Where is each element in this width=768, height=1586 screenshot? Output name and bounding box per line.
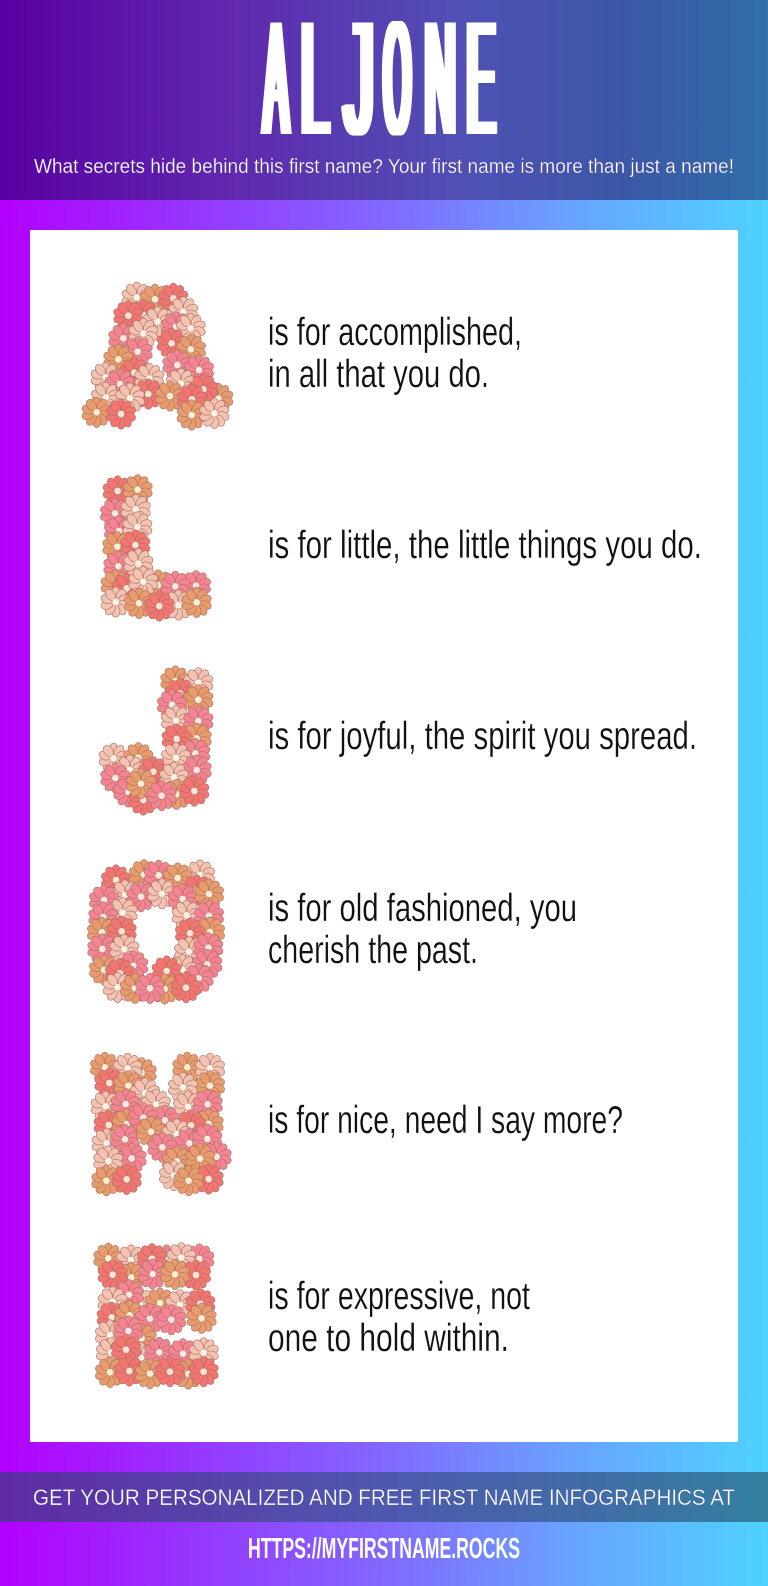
title	[260, 0, 498, 169]
icon: flower letter N	[89, 1052, 232, 1196]
text: O line	[268, 887, 577, 972]
icon: flower letter J	[98, 666, 214, 815]
icon: flower letter O	[86, 859, 226, 1004]
text: A line	[268, 311, 522, 396]
icon: flower letter A	[81, 282, 234, 430]
header band	[0, 0, 768, 200]
white content panel	[30, 230, 738, 1442]
text: O line: is for old fashioned, you	[268, 887, 577, 930]
text: O line: cherish the past.	[268, 929, 478, 972]
text: A line: is for accomplished,	[268, 311, 522, 354]
icon: flower letter L	[99, 474, 212, 621]
footer band	[0, 1472, 768, 1522]
icon: flower letter E	[93, 1242, 219, 1389]
text: N line: is for nice, need I say more?	[268, 1099, 623, 1142]
text: E line: is for expressive, not	[268, 1275, 530, 1318]
footer url: HTTPS://MYFIRSTNAME.ROCKS	[248, 1533, 520, 1565]
text: E line	[268, 1275, 530, 1360]
text: A line: in all that you do.	[268, 353, 489, 396]
subtitle: What secrets hide behind this first name? Your first name is more than just a name!	[34, 156, 734, 178]
text: E line: one to hold within.	[268, 1317, 509, 1360]
footer text: GET YOUR PERSONALIZED AND FREE FIRST NAME INFOGRAPHICS AT	[33, 1485, 735, 1510]
